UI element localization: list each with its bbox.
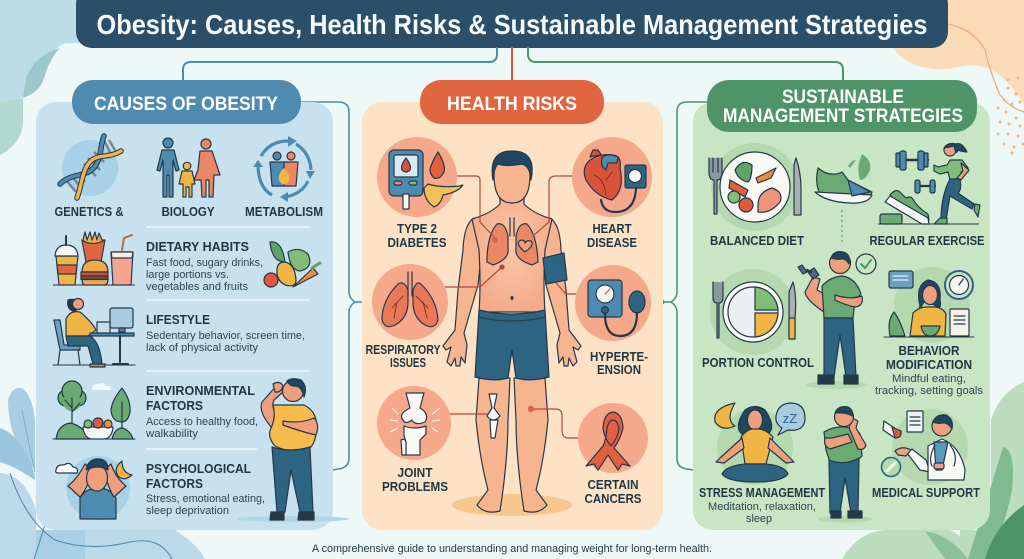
icon: overweight person <box>237 379 349 522</box>
title banner: Obesity: Causes, Health Risks & Sustainable Management Strategies <box>96 9 928 40</box>
side connector: management to health risks <box>659 102 707 470</box>
risk: respiratory issues <box>366 264 448 370</box>
risk: type 2 diabetes <box>377 137 463 250</box>
icon: fast food <box>53 232 135 285</box>
text: dietary habits <box>146 239 263 293</box>
text: lifestyle: LIFESTYLE <box>146 312 210 327</box>
icon: doctor and medicine <box>882 409 968 485</box>
icon: regular exercise runner <box>878 144 980 224</box>
icon: metabolism cycle <box>253 136 315 202</box>
risk: heart disease: DISEASE <box>587 235 637 250</box>
text: environmental factors <box>145 383 258 440</box>
risk: heart disease <box>572 137 652 250</box>
panel: sustainable management strategies <box>693 80 990 530</box>
connectors from risks to body <box>432 176 588 438</box>
risk: hypertension <box>575 265 651 377</box>
icon: portion control plate <box>710 269 796 355</box>
heading: health risks <box>420 80 604 124</box>
risk: type 2 diabetes: DIABETES <box>388 235 447 250</box>
icon: meditating woman: zZ <box>783 411 797 426</box>
risk: certain cancers: CERTAIN <box>588 477 638 492</box>
side connector: causes to health risks <box>300 102 367 470</box>
heading: sustainable management strategies: SUSTAINABLE <box>782 87 904 108</box>
icon: meditating woman <box>715 403 805 485</box>
heading: sustainable management strategies: MANAGEMENT STRATEGIES <box>723 106 963 127</box>
label: biology: BIOLOGY <box>162 205 215 219</box>
heading: health risks: HEALTH RISKS <box>447 94 577 115</box>
icon: man lifting dumbbell <box>798 252 876 389</box>
heading: causes of obesity: CAUSES OF OBESITY <box>94 94 278 115</box>
text: behavior modification: tracking, setting goals <box>875 385 984 397</box>
text: psychological factors <box>146 461 265 517</box>
risk: certain cancers: CANCERS <box>584 491 642 506</box>
icon: knee joint on body <box>487 394 500 438</box>
icon: running shoe and leaf <box>815 154 872 245</box>
risk: hypertension: HYPERTE- <box>590 349 648 364</box>
risk: respiratory issues: RESPIRATORY <box>366 342 441 357</box>
risk: joint problems <box>377 386 451 494</box>
heading: causes of obesity <box>72 80 301 124</box>
organs on body: lungs and heart <box>487 218 538 265</box>
text: dietary habits: Fast food, sugary drinks, <box>146 257 263 269</box>
label: regular exercise: REGULAR EXERCISE <box>870 233 985 248</box>
icon: behavior modification woman <box>884 267 974 343</box>
label: medical support: MEDICAL SUPPORT <box>872 485 980 500</box>
text: stress management: sleep <box>746 513 772 525</box>
risk: joint problems: PROBLEMS <box>382 479 448 494</box>
text: psychological factors: PSYCHOLOGICAL <box>146 461 251 476</box>
icon: man thinking <box>818 407 872 522</box>
text: dietary habits: vegetables and fruits <box>146 281 248 293</box>
text: dietary habits: DIETARY HABITS <box>146 239 249 254</box>
text: behavior modification: Mindful eating, <box>892 373 966 385</box>
text: environmental factors: FACTORS <box>146 398 203 413</box>
panel: health risks <box>362 80 663 530</box>
human body figure <box>443 151 581 516</box>
icon: balanced diet plate <box>709 143 801 231</box>
text: environmental factors: ENVIRONMENTAL <box>146 383 255 398</box>
label: metabolism: METABOLISM <box>245 205 323 219</box>
risk: type 2 diabetes: TYPE 2 <box>397 221 437 236</box>
text: behavior modification: BEHAVIOR <box>898 343 960 358</box>
icon: person at desk <box>53 298 135 367</box>
text: lifestyle <box>146 312 305 354</box>
icon: stressed person <box>56 456 132 520</box>
text: lifestyle: lack of physical activity <box>146 342 258 354</box>
panel: causes of obesity <box>36 80 349 530</box>
risk: hypertension: ENSION <box>597 362 641 377</box>
text: lifestyle: Sedentary behavior, screen time, <box>146 330 305 342</box>
risk: heart disease: HEART <box>592 221 632 236</box>
text: environmental factors: Access to healthy food, <box>146 416 258 428</box>
text: stress management: Meditation, relaxation, <box>708 501 816 513</box>
icon: family <box>157 138 220 197</box>
footer caption: A comprehensive guide to understanding and managing weight for long-term health. <box>312 543 712 555</box>
label: balanced diet: BALANCED DIET <box>710 233 804 248</box>
icon: blood pressure cuff on arm <box>543 253 567 284</box>
icon: DNA helix <box>60 136 121 198</box>
text: stress management: STRESS MANAGEMENT <box>699 485 825 500</box>
connector tree from title to sections <box>183 47 843 80</box>
risk: certain cancers <box>578 403 648 506</box>
text: environmental factors: walkability <box>145 428 199 440</box>
heading: sustainable management strategies <box>707 80 977 132</box>
text: behavior modification <box>875 343 984 397</box>
text: behavior modification: MODIFICATION <box>886 357 972 372</box>
risk: respiratory issues: ISSUES <box>390 355 426 370</box>
text: dietary habits: large portions vs. <box>146 269 229 281</box>
risk: joint problems: JOINT <box>398 465 433 480</box>
text: psychological factors: FACTORS <box>146 476 203 491</box>
text: psychological factors: Stress, emotional eating, <box>146 493 265 505</box>
label: portion control: PORTION CONTROL <box>702 355 814 370</box>
text: psychological factors: sleep deprivation <box>146 505 229 517</box>
label: genetics: GENETICS & <box>54 205 124 219</box>
text: stress management <box>699 485 825 525</box>
icon: fruits and vegetables <box>264 242 320 287</box>
icon: park and healthy food <box>53 381 135 439</box>
title banner <box>76 0 948 48</box>
